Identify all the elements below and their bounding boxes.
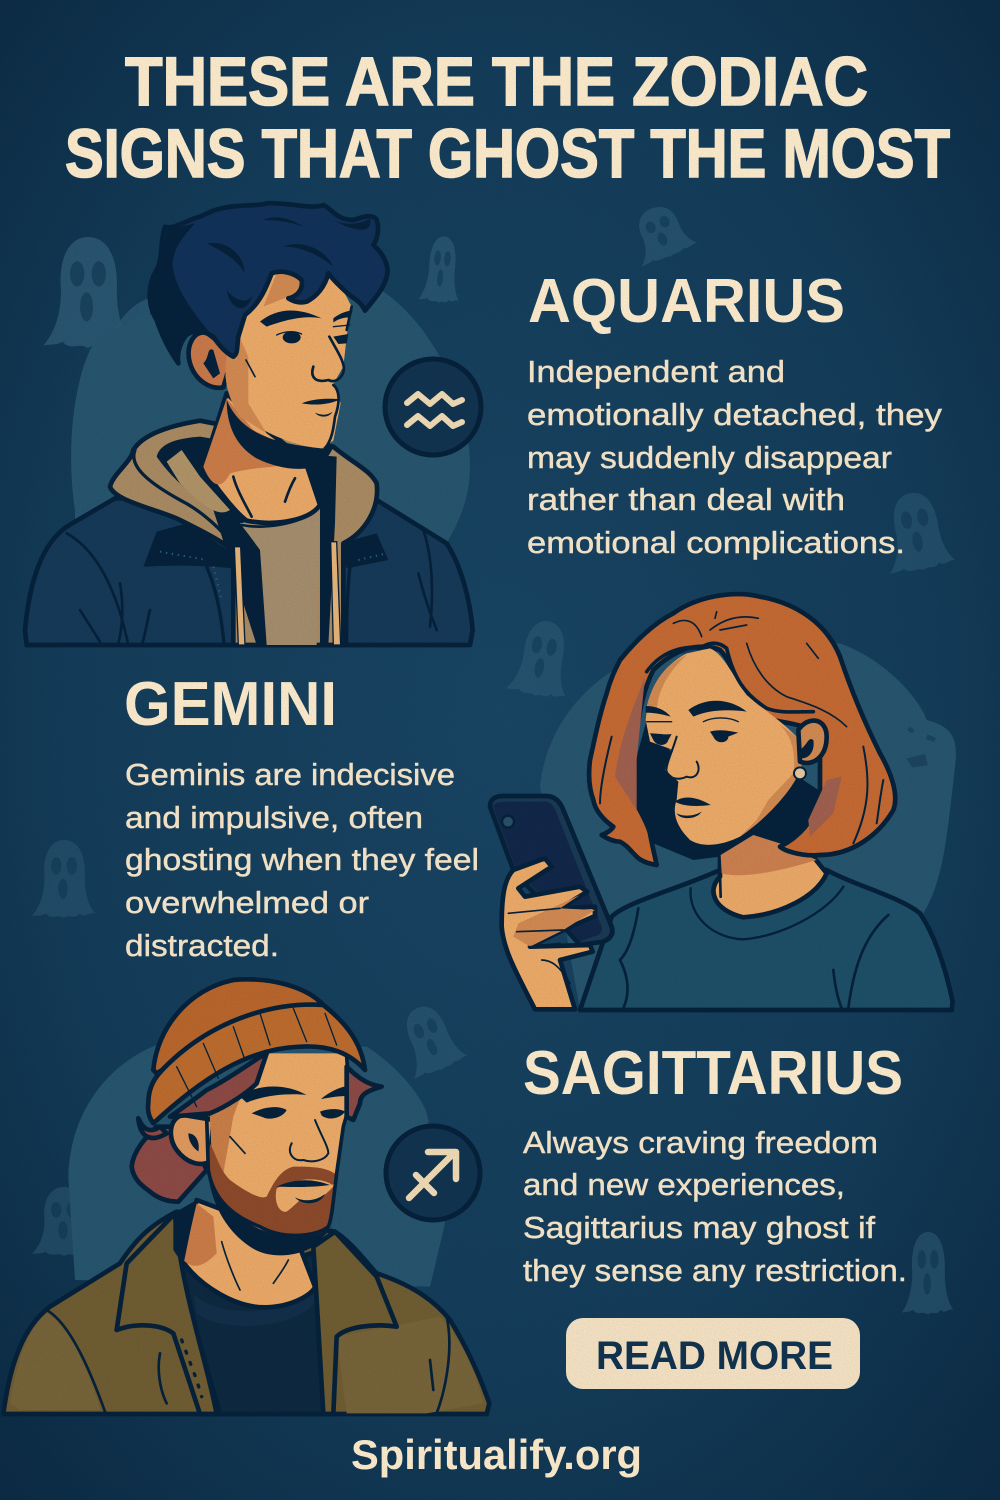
eyes	[650, 730, 738, 745]
ghost: small beside hair	[418, 235, 464, 305]
ghost: left of bearded man	[32, 1187, 95, 1256]
side hair	[170, 1053, 267, 1117]
eyes	[283, 331, 301, 343]
text: Gemini description: overwhelmed or	[125, 885, 369, 920]
jacket stitching	[160, 552, 387, 600]
t-shirt collar	[193, 1287, 315, 1326]
heading: Gemini: GEMINI	[124, 670, 337, 739]
face shade	[740, 720, 802, 837]
sweater	[580, 870, 953, 1010]
ghost: right of Aquarius	[877, 487, 956, 576]
eyebrows	[646, 701, 747, 717]
jacket lighter panels	[10, 1313, 483, 1413]
hood inner shadow	[157, 437, 337, 645]
long hair back	[132, 1127, 207, 1202]
jacket lines	[67, 530, 437, 645]
jacket	[25, 498, 473, 645]
hand	[502, 858, 595, 1009]
jacket collar shadow	[143, 523, 388, 568]
beard	[208, 1143, 337, 1235]
backdrop circle	[68, 1045, 445, 1287]
ear	[798, 721, 827, 763]
jacket front edge	[207, 567, 350, 645]
collar lapel right	[313, 1232, 397, 1414]
collar lapel left	[117, 1213, 217, 1414]
nose	[290, 1120, 328, 1161]
phone	[490, 796, 612, 945]
t-shirt	[177, 1247, 333, 1414]
heading: Aquarius: AQUARIUS	[528, 267, 845, 336]
phone back	[493, 802, 602, 942]
hair strands	[600, 737, 883, 847]
earring	[794, 767, 806, 779]
sleeve lines	[620, 908, 888, 1008]
hood fold line	[134, 450, 233, 547]
backdrop circle	[71, 286, 470, 645]
heading: Sagittarius: SAGITTARIUS	[523, 1039, 903, 1108]
cheek mark	[246, 360, 255, 377]
face	[646, 648, 802, 845]
face	[225, 272, 352, 448]
beanie crown	[153, 979, 323, 1073]
ghost: above Sagittarius	[390, 997, 469, 1081]
faint ghost marks	[908, 728, 935, 765]
hair back shadow	[627, 720, 823, 860]
jaw outline	[325, 307, 352, 448]
cheek mark	[230, 1137, 245, 1153]
mouth	[302, 399, 341, 417]
button: read more	[566, 1318, 860, 1389]
hair highlight purple	[615, 677, 842, 837]
text: Aquarius description: Independent and	[527, 354, 785, 389]
ear	[171, 1115, 213, 1164]
mouth	[277, 1180, 330, 1203]
figure: Gemini woman with phone	[490, 594, 956, 1010]
ghost: left of woman	[505, 616, 578, 701]
eyebrows	[240, 1086, 350, 1103]
eyebrows	[260, 311, 353, 327]
nose	[666, 737, 699, 779]
collar line	[242, 505, 321, 527]
title: THESE ARE THE ZODIAC	[125, 43, 868, 120]
text: Aquarius description	[527, 354, 943, 560]
neck	[203, 393, 320, 523]
text: Sagittarius description: they sense any restriction.	[523, 1253, 907, 1288]
jaw outline	[207, 1057, 350, 1235]
mouth	[675, 798, 711, 818]
figure: Sagittarius bearded man	[3, 979, 489, 1414]
neck	[713, 833, 827, 917]
neck shade	[203, 398, 302, 484]
neck	[182, 1200, 315, 1307]
text: Aquarius description: may suddenly disappear	[527, 440, 892, 475]
drawstrings	[234, 542, 341, 645]
nose	[312, 337, 344, 381]
footer: website: Spiritualify.org	[351, 1431, 642, 1478]
cheek shade	[225, 323, 267, 433]
face shade	[210, 1057, 263, 1187]
beanie band	[148, 1005, 365, 1123]
face	[210, 1053, 350, 1237]
ear	[189, 332, 233, 388]
neck shade	[183, 1203, 217, 1266]
ghost: upper left	[43, 237, 131, 349]
zipper dots	[182, 1340, 202, 1397]
hair parting lines	[647, 643, 813, 712]
text: Aquarius description: emotional complications.	[527, 525, 905, 560]
beanie ribs	[177, 1008, 337, 1107]
ghost: lower right	[902, 1232, 953, 1315]
neck shade	[721, 835, 817, 875]
hair shadows	[149, 217, 370, 363]
ghost: top centre	[622, 197, 698, 268]
text: Sagittarius description: Always craving freedom	[523, 1125, 878, 1160]
text: Gemini description: and impulsive, often	[125, 800, 423, 835]
figure: Aquarius man in hoodie	[25, 203, 473, 645]
neck creases	[222, 1242, 288, 1290]
title	[65, 43, 950, 192]
jaw shadow	[227, 400, 335, 469]
text: Gemini description: ghosting when they feel	[125, 842, 479, 877]
icon: Aquarius badge	[385, 359, 481, 455]
finger shading	[513, 895, 595, 947]
hair	[589, 594, 895, 865]
text: Aquarius description: emotionally detached, they	[527, 397, 943, 432]
text: Sagittarius description: and new experiences,	[523, 1167, 845, 1202]
backdrop circle	[540, 643, 956, 1010]
jacket	[3, 1212, 489, 1414]
ghost: left of Gemini text	[32, 840, 95, 918]
text: Aquarius description: rather than deal with	[527, 482, 845, 517]
text: Gemini description: Geminis are indecisive	[125, 757, 455, 792]
text: Gemini description: distracted.	[125, 928, 279, 963]
ghost: behind first figure	[100, 298, 150, 365]
neck creases	[233, 477, 295, 517]
text: Sagittarius description	[523, 1125, 907, 1288]
hood	[110, 421, 377, 645]
eyes	[252, 1107, 345, 1119]
text: Sagittarius description: Sagittarius may ghost if	[523, 1210, 875, 1245]
hair	[150, 203, 388, 363]
neck shadow	[173, 1177, 333, 1265]
jacket lines	[47, 1310, 449, 1413]
icon: Sagittarius badge	[386, 1126, 480, 1220]
text: Gemini description	[125, 757, 479, 963]
t-shirt	[242, 505, 320, 645]
inner hood	[167, 450, 230, 512]
collar	[691, 887, 843, 939]
button: read more: READ MORE	[596, 1334, 833, 1378]
